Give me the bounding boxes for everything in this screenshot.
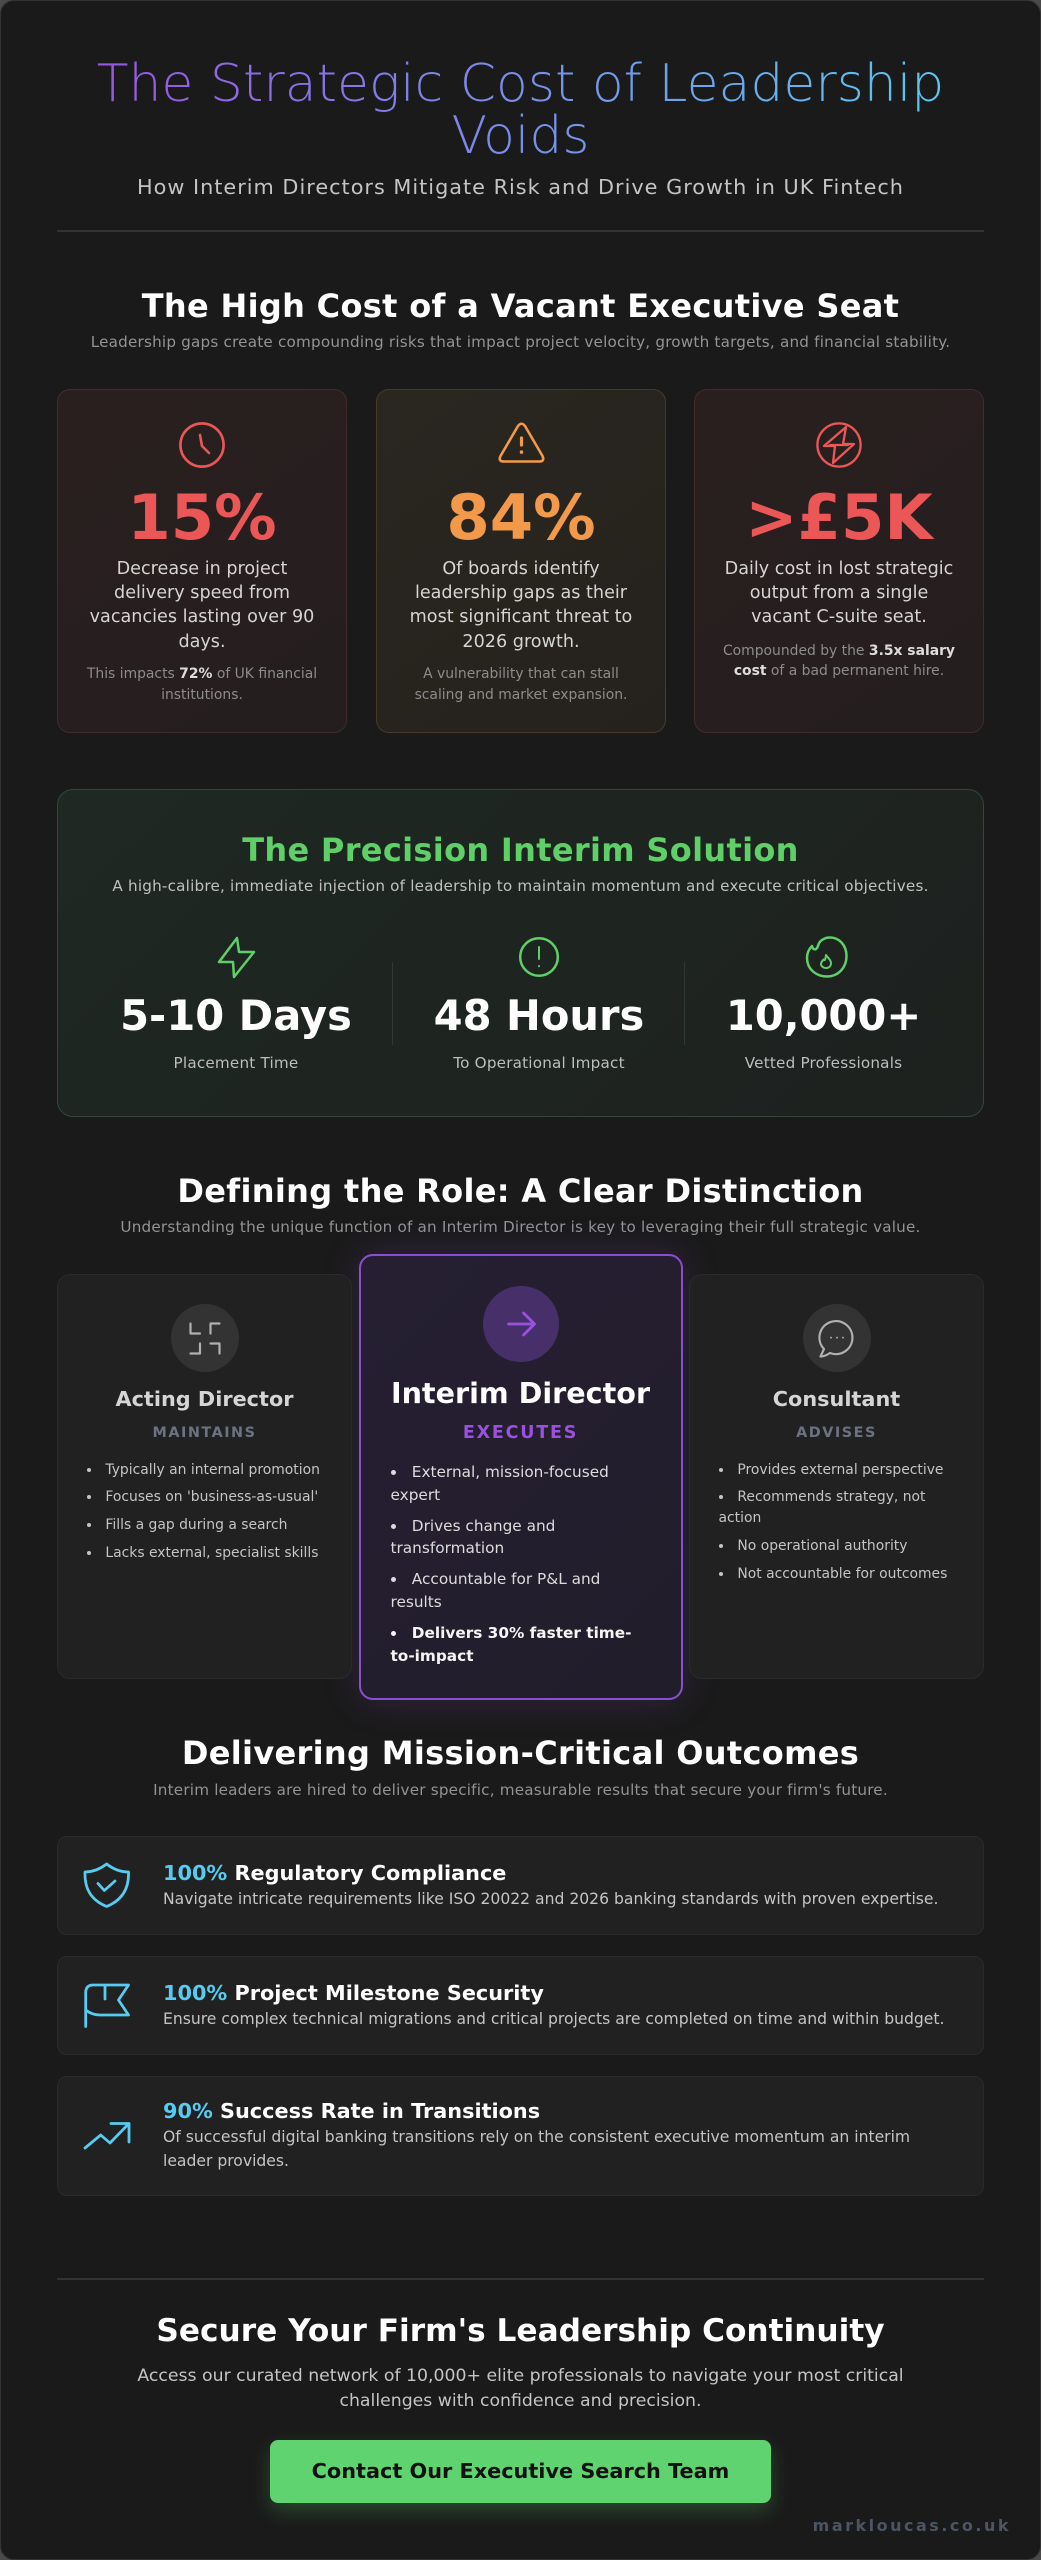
outcome description: leader provides. <box>163 2152 289 2170</box>
title: Voids <box>452 106 589 166</box>
icon: warning triangle <box>498 422 544 463</box>
stat value: 84% <box>446 481 596 554</box>
panel: consultant <box>689 1274 984 1679</box>
stat note: institutions. <box>161 687 243 703</box>
metric label: professionals: Vetted Professionals <box>745 1054 902 1072</box>
metric value: professionals: 10,000+ <box>726 991 921 1040</box>
stat description: 2026 growth. <box>462 632 580 652</box>
panel: stat 15% <box>57 389 347 733</box>
section title: The High Cost of a Vacant Executive Seat <box>142 287 899 325</box>
stat description <box>90 559 314 652</box>
card title: Acting Director <box>116 1387 294 1411</box>
stat note: This impacts 72% of UK financial <box>87 666 317 682</box>
panel: stat >£5K <box>694 389 984 733</box>
icon: arrow <box>482 1286 558 1362</box>
stat note <box>86 666 317 703</box>
card list: Accountable for P&L and results <box>390 1570 600 1611</box>
outcome title: 90% Success Rate in Transitions <box>163 2099 540 2123</box>
outcome description <box>163 2128 910 2170</box>
cta button: Contact Our Executive Search Team <box>312 2459 729 2483</box>
card list: Fills a gap during a search <box>105 1517 287 1533</box>
watermark: markloucas.co.uk <box>813 2516 1011 2535</box>
card tag: MAINTAINS <box>153 1425 256 1441</box>
icon: clock <box>179 422 225 468</box>
heading: high cost <box>91 287 950 351</box>
outcome description: Navigate intricate requirements like ISO 20022 and 2026 banking standards with proven expertise. <box>163 1890 938 1908</box>
stat value: >£5K <box>745 481 933 554</box>
cta title: Secure Your Firm's Leadership Continuity <box>156 2313 885 2349</box>
card title: Consultant <box>773 1387 900 1411</box>
cta button <box>270 2440 771 2503</box>
cta text <box>137 2366 904 2410</box>
stat description: vacant C-suite seat. <box>751 607 927 627</box>
cta text: challenges with confidence and precision. <box>339 2390 702 2410</box>
heading: outcomes <box>153 1734 888 1799</box>
icon: shield check <box>84 1862 130 1908</box>
call to action <box>137 2313 904 2519</box>
panel: transitions <box>57 2076 984 2196</box>
stat note: A vulnerability that can stall <box>423 666 619 682</box>
title: The Strategic Cost of Leadership <box>97 54 944 114</box>
panel: acting director <box>57 1274 352 1679</box>
stat description: output from a single <box>750 583 928 603</box>
stat description: delivery speed from <box>114 583 290 603</box>
card list: Delivers 30% faster time-to-impact <box>390 1624 631 1665</box>
stat note: scaling and market expansion. <box>415 687 627 703</box>
section title: Defining the Role: A Clear Distinction <box>177 1172 864 1210</box>
card list: No operational authority <box>737 1538 907 1554</box>
outcome title: 100% Regulatory Compliance <box>163 1861 506 1885</box>
card list: Focuses on 'business-as-usual' <box>105 1489 318 1505</box>
card tag: EXECUTES <box>463 1422 578 1442</box>
outcome title: 100% Project Milestone Security <box>163 1981 544 2005</box>
card list: Typically an internal promotion <box>105 1462 320 1478</box>
card list <box>87 1462 320 1561</box>
card list: Not accountable for outcomes <box>737 1566 947 1582</box>
icon: collapse corners <box>170 1304 238 1372</box>
stat note <box>723 642 955 679</box>
icon: chat bubble <box>802 1304 870 1372</box>
section title: Delivering Mission-Critical Outcomes <box>182 1734 859 1772</box>
metric value: hours: 48 Hours <box>434 991 644 1040</box>
card list <box>390 1463 631 1665</box>
section subtitle: Leadership gaps create compounding risks that impact project velocity, growth targets, and financial stability. <box>91 333 950 351</box>
stat value: 15% <box>127 481 277 554</box>
subtitle: How Interim Directors Mitigate Risk and Drive Growth in UK Fintech <box>137 174 904 198</box>
stat description: Daily cost in lost strategic <box>725 559 953 579</box>
card list: External, mission-focused expert <box>390 1463 609 1504</box>
cta text: Access our curated network of 10,000+ elite professionals to navigate your most critical <box>137 2366 904 2386</box>
card list: Drives change and transformation <box>390 1517 555 1557</box>
stat description: Decrease in project <box>117 559 287 579</box>
section subtitle: Understanding the unique function of an Interim Director is key to leveraging their full strategic value. <box>120 1218 921 1236</box>
icon: alert circle <box>518 937 560 977</box>
card list: Lacks external, specialist skills <box>105 1545 318 1561</box>
icon: bolt in circle <box>816 422 862 468</box>
metric label: placement: Placement Time <box>174 1054 298 1072</box>
section subtitle: Interim leaders are hired to deliver specific, measurable results that secure your firm's future. <box>153 1781 888 1799</box>
stat description: days. <box>178 632 226 652</box>
panel title: The Precision Interim Solution <box>242 831 799 869</box>
heading: defining the role <box>120 1172 921 1236</box>
stat note: Compounded by the 3.5x salary <box>723 642 955 658</box>
icon: flame in circle <box>806 936 848 978</box>
panel subtitle: A high-calibre, immediate injection of leadership to maintain momentum and execute critical objectives. <box>112 876 929 894</box>
stat description <box>725 559 953 627</box>
panel: interim director <box>358 1254 682 1700</box>
stat note <box>415 666 627 703</box>
card list: Recommends strategy, not action <box>718 1489 926 1526</box>
title <box>57 58 984 162</box>
panel: project milestone <box>57 1956 984 2055</box>
panel: precision interim solution <box>57 789 984 1117</box>
stat description <box>410 559 632 652</box>
panel: stat 84% <box>376 389 666 733</box>
stat description: leadership gaps as their <box>415 583 627 603</box>
icon: trend up <box>84 2122 130 2150</box>
outcome description: Ensure complex technical migrations and critical projects are completed on time and within budget. <box>163 2010 944 2028</box>
header <box>97 54 944 198</box>
card list <box>718 1462 947 1582</box>
card list: Provides external perspective <box>737 1462 943 1478</box>
panel: regulatory compliance <box>57 1836 984 1935</box>
card title: Interim Director <box>391 1376 650 1410</box>
metric value: placement: 5-10 Days <box>120 991 352 1040</box>
stat description: vacancies lasting over 90 <box>90 607 314 627</box>
icon: flag <box>84 1984 130 2028</box>
stat note: cost of a bad permanent hire. <box>734 663 944 679</box>
card tag: ADVISES <box>796 1425 877 1441</box>
outcome description: Of successful digital banking transitions rely on the consistent executive momentum an interim <box>163 2128 910 2146</box>
icon: lightning <box>218 936 256 978</box>
stat description: most significant threat to <box>410 607 632 627</box>
stat description: Of boards identify <box>442 559 600 579</box>
metric label: hours: To Operational Impact <box>453 1054 625 1072</box>
